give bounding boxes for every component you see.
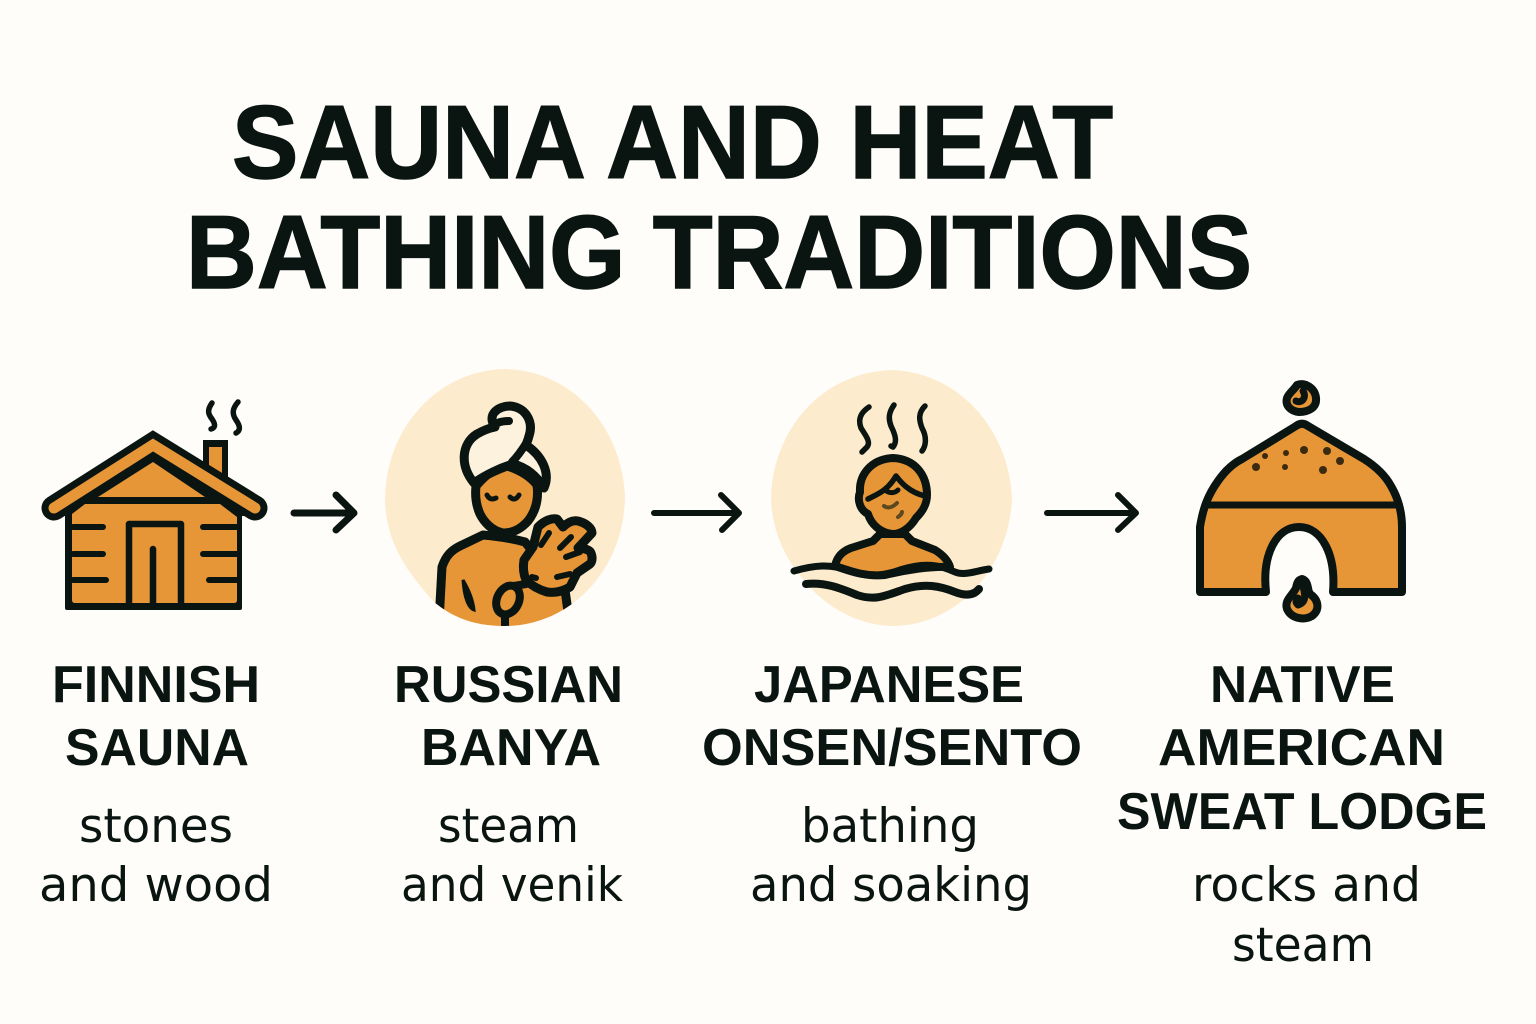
head [859,458,927,534]
heading: FINNISH [52,656,260,714]
heading: BANYA [421,719,601,777]
heading: SWEAT LODGE [1117,783,1487,841]
background circle [385,369,625,626]
title [186,85,1252,311]
arrow 3 [1047,495,1136,530]
column 2 label: Russian banya [394,656,624,913]
icon: Japanese onsen bather [771,370,1012,626]
top stone [1287,384,1316,412]
turban [464,406,546,488]
bottom stone [1286,579,1317,618]
heading: SAUNA [65,719,249,777]
icon: Native American sweat lodge [1200,384,1402,618]
heading: RUSSIAN [394,656,623,714]
background circle [771,370,1012,626]
dots [1252,446,1344,474]
description: steam [1232,918,1374,973]
description: rocks and [1192,858,1421,913]
description: steam [438,799,579,854]
heading: ONSEN/SENTO [702,719,1082,777]
description [750,799,1032,913]
heading [1117,656,1487,841]
description: and soaking [750,858,1032,913]
heading [52,656,260,777]
shoulders [835,534,950,575]
column 4 label: Native American sweat lodge [1117,656,1487,973]
closed eyes [487,495,519,499]
heading [394,656,623,777]
title: SAUNA AND HEAT [232,85,1113,201]
title: BATHING TRADITIONS [186,195,1252,311]
water waves [794,565,989,575]
body [438,535,572,640]
arrow 1 [294,495,354,530]
description [1192,858,1421,973]
description: and wood [39,858,273,913]
description: bathing [801,799,979,854]
dome divider [1207,502,1396,508]
heading: NATIVE [1210,656,1395,714]
face [868,476,925,499]
description [401,799,624,913]
icon: Finnish sauna log cabin [54,402,255,610]
steam [860,405,925,452]
heading [702,656,1082,777]
heading: JAPANESE [754,656,1024,714]
venik [523,519,592,592]
column 1 label: Finnish sauna [39,656,273,913]
description [39,799,273,913]
description: stones [79,799,233,854]
arrow 2 [654,495,739,530]
icon: Russian banya person with venik [385,369,625,640]
heading: AMERICAN [1158,719,1445,777]
lodge dome [1200,424,1402,592]
head [476,466,538,533]
description: and venik [401,858,624,913]
column 3 label: Japanese onsen/sento [702,656,1082,913]
